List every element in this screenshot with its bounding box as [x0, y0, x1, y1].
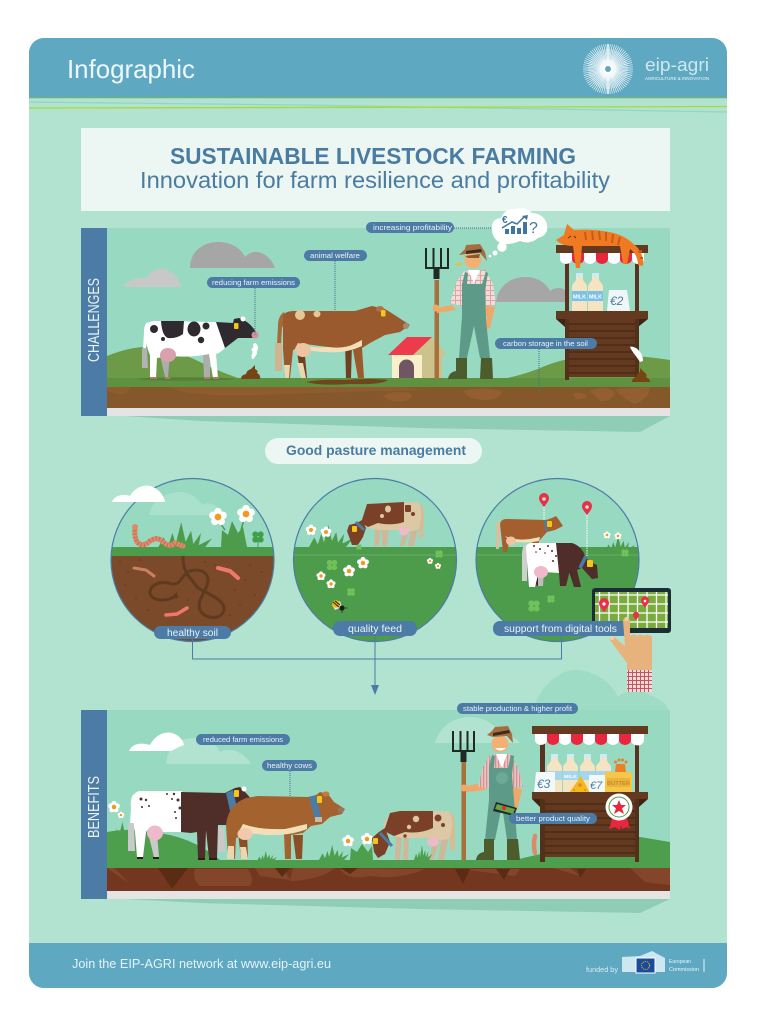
label: reduced farm emissions	[196, 734, 290, 745]
label: carbon storage in the soil	[495, 338, 597, 392]
label: reducing farm emissions: reducing farm emissions	[212, 278, 295, 287]
farmer with phone	[453, 726, 523, 860]
milk bottles: MILK	[573, 294, 586, 300]
tablet	[592, 588, 671, 633]
milk bottles: MILK	[589, 294, 602, 300]
footer text: Join the EIP-AGRI network at www.eip-agri.eu	[72, 956, 331, 971]
thought bubble	[489, 208, 547, 257]
white and dark cow	[522, 543, 598, 587]
label: animal welfare: animal welfare	[310, 251, 360, 260]
price tag €2	[607, 290, 630, 311]
white cloud	[112, 485, 165, 502]
side heading: challenges: CHALLENGES	[86, 278, 103, 362]
hills and ground	[107, 830, 670, 891]
label: support from digital tools: support from digital tools	[504, 623, 617, 635]
grey clouds	[123, 242, 568, 302]
panel: benefits	[81, 670, 670, 913]
brown cow	[496, 516, 563, 553]
grazing cow	[347, 502, 424, 546]
cow: spotted white and dark	[128, 786, 263, 859]
label: increasing profitability: increasing profitability	[373, 223, 452, 232]
icon: manure with emissions	[241, 343, 260, 379]
funded by European Commission logo: European	[669, 959, 691, 965]
clouds	[129, 717, 520, 764]
label: better product quality: better product quality	[516, 814, 590, 823]
header band	[29, 38, 727, 112]
earthworms	[134, 527, 238, 615]
heading: good pasture management	[265, 438, 482, 464]
side heading: challenges	[81, 228, 107, 416]
paw icon	[614, 758, 628, 772]
label: healthy cows: healthy cows	[267, 761, 312, 770]
label: healthy cows	[262, 760, 317, 796]
label: carbon storage in the soil: carbon storage in the soil	[503, 339, 588, 348]
market stall with milk	[495, 224, 650, 392]
title block	[81, 128, 670, 211]
awning	[556, 245, 648, 264]
grass tufts	[158, 522, 212, 547]
hand tapping tablet	[610, 617, 652, 692]
funded by European Commission logo	[586, 951, 704, 974]
connector lines and arrow	[192, 636, 562, 695]
background mound	[533, 670, 670, 720]
icon: rising profit chart: ?	[529, 220, 538, 237]
awning	[532, 726, 648, 745]
farmer with pitchfork	[426, 244, 496, 379]
price tag €2: €2	[610, 294, 624, 308]
side heading: benefits	[81, 710, 107, 899]
butter box: BUTTER	[607, 781, 630, 787]
sleeping cat	[556, 224, 643, 268]
cow: grazing	[372, 811, 455, 860]
bee	[332, 600, 348, 613]
main title: SUSTAINABLE LIVESTOCK FARMING	[170, 143, 576, 169]
label: better product quality	[509, 813, 597, 824]
label: healthy soil	[154, 626, 231, 639]
label: reducing farm emissions	[207, 277, 300, 336]
manure	[632, 368, 650, 382]
cow: healthy brown	[226, 792, 345, 859]
label: increasing profitability	[366, 222, 491, 233]
black and white cow	[138, 316, 258, 381]
label: reduced farm emissions: reduced farm emissions	[203, 735, 283, 744]
icon: rising profit chart	[502, 215, 538, 237]
side heading: benefits: BENEFITS	[86, 776, 103, 838]
icon: dog house	[388, 337, 447, 378]
milk bottles	[572, 273, 603, 311]
funded by European Commission logo: Commission	[669, 967, 699, 973]
subtitle: Innovation for farm resilience and profitability	[140, 167, 611, 193]
circle: support from digital tools	[476, 478, 640, 642]
pitchfork	[426, 248, 448, 379]
phone	[493, 802, 517, 816]
panel: challenges	[81, 208, 670, 432]
milk bottles: MILK	[564, 774, 578, 779]
logo: eip-agri	[583, 44, 709, 94]
heading: good pasture management: Good pasture management	[286, 442, 466, 458]
footer band	[29, 943, 727, 988]
label: support from digital tools	[493, 621, 630, 636]
circle: quality feed	[293, 478, 457, 642]
location pins	[539, 493, 592, 556]
logo: eip-agri: eip-agri	[645, 55, 709, 75]
label: stable production and higher profit: stable production & higher profit	[463, 704, 573, 713]
label: animal welfare	[304, 250, 367, 311]
grass and flowers	[107, 801, 373, 861]
label: quality feed: quality feed	[348, 623, 402, 635]
hills and ground	[107, 347, 670, 408]
cheese wedge	[569, 776, 590, 793]
circle: healthy soil	[111, 478, 275, 644]
logo: eip-agri: AGRICULTURE & INNOVATION	[645, 76, 709, 81]
price tag €3: €3	[537, 777, 551, 791]
pitchfork	[453, 731, 474, 860]
price tag €7: €7	[590, 780, 603, 792]
label: healthy soil: healthy soil	[167, 627, 218, 639]
heading: Infographic: Infographic	[67, 54, 195, 84]
worm tunnel	[150, 556, 224, 618]
worm	[534, 836, 535, 853]
brown cow	[275, 306, 410, 378]
market stall with produce	[532, 726, 648, 862]
label: quality feed	[333, 621, 417, 636]
funded by European Commission logo: funded by	[586, 965, 618, 974]
quality rosette	[606, 794, 632, 830]
icon: rising profit chart: €	[502, 215, 508, 226]
